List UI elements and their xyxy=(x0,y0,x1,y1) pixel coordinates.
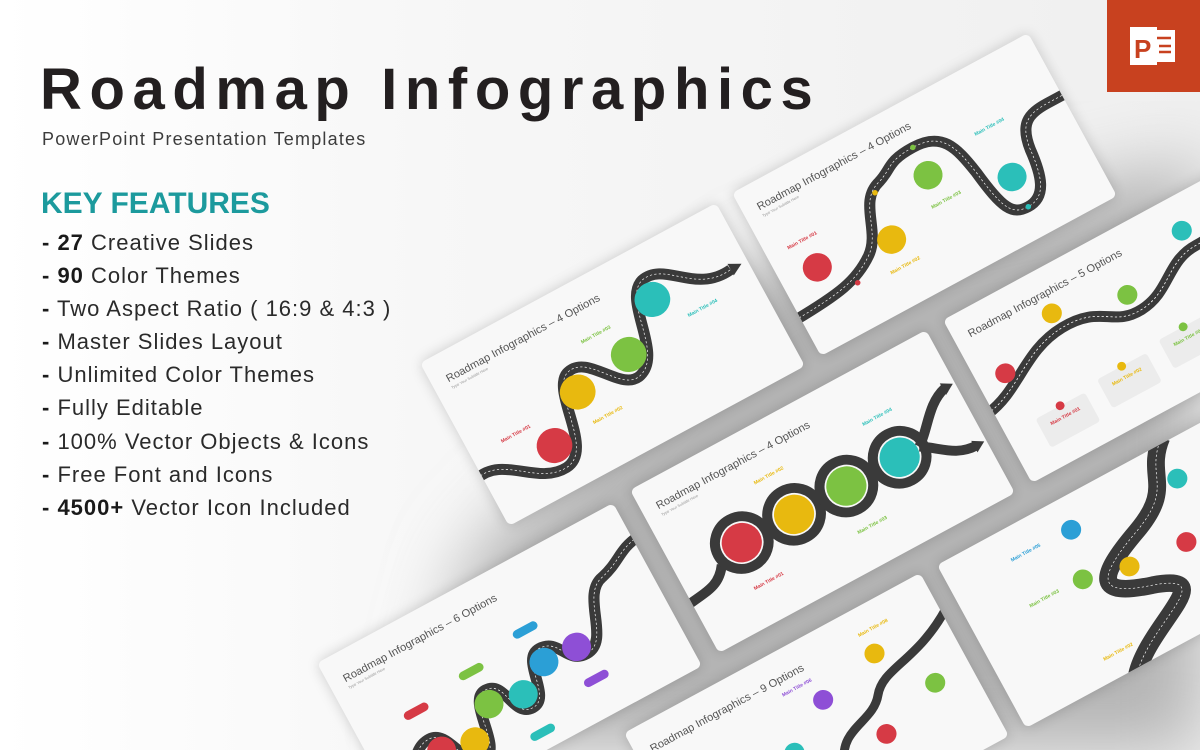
slide: S-road pins: Main Title #02 xyxy=(1102,642,1134,663)
feature list: - 100% Vector Objects & Icons xyxy=(42,429,369,454)
feature list: - Two Aspect Ratio ( 16:9 & 4:3 ) xyxy=(42,296,391,321)
slide: 4 options left: Main Title #02 xyxy=(592,405,624,426)
slide: S-road pins: Main Title #03 xyxy=(1029,588,1061,609)
slide: 4 options top xyxy=(732,33,1117,356)
slide: 4 options left: Main Title #04 xyxy=(687,298,719,319)
slide: 4 options left: Type Your Subtitle Here xyxy=(450,366,489,390)
slide: 9 options: Main Title #08 xyxy=(857,618,889,639)
subtitle: PowerPoint Presentation Templates xyxy=(42,129,366,149)
slide: 4 options left xyxy=(420,203,805,526)
feature list: - 4500+ Vector Icon Included xyxy=(42,495,351,520)
feature list xyxy=(42,230,391,520)
slide: 4 options top: Main Title #03 xyxy=(930,190,962,211)
slide: 4 options top: Main Title #04 xyxy=(974,117,1006,138)
slide: 4 options center: Main Title #04 xyxy=(861,407,893,428)
slide: 9 options: Main Title #06 xyxy=(781,677,813,698)
slide: 5 options: Roadmap Infographics – 5 Options xyxy=(966,247,1125,340)
slide: 5 options xyxy=(943,160,1200,483)
slide: 4 options center: Type Your Subtitle Here xyxy=(660,493,699,517)
icon: powerpoint xyxy=(1107,0,1200,92)
slide: 4 options center: Main Title #01 xyxy=(753,571,785,592)
slide: S-road pins: Main Title #05 xyxy=(1010,543,1042,563)
feature list: - Master Slides Layout xyxy=(42,329,283,354)
slide: 4 options top: Type Your Subtitle Here xyxy=(761,194,800,218)
slide: 4 options center xyxy=(630,330,1015,653)
slide: 4 options center: Main Title #02 xyxy=(753,465,785,486)
feature list: - Fully Editable xyxy=(42,395,204,420)
feature list: - Free Font and Icons xyxy=(42,462,273,487)
slide: 5 options: Main Title #02 xyxy=(1111,367,1143,388)
slide: 4 options left: Roadmap Infographics – 4 Options xyxy=(444,292,603,385)
feature list: - 27 Creative Slides xyxy=(42,230,254,255)
slide: 4 options left: Main Title #03 xyxy=(580,325,612,345)
slide: 9 options xyxy=(624,573,1009,750)
slide: 4 options top: Roadmap Infographics – 4 Options xyxy=(755,120,914,213)
icon: powerpoint: P xyxy=(1134,34,1151,64)
slide: 4 options center: Main Title #03 xyxy=(857,515,889,536)
heading: key features: KEY FEATURES xyxy=(41,187,270,220)
slide: 4 options center: Roadmap Infographics – 4 Options xyxy=(654,419,813,512)
slide: 6 options: Type Your Subtitle Here xyxy=(347,666,386,690)
title: Roadmap Infographics xyxy=(40,57,820,122)
slide: 4 options top: Main Title #01 xyxy=(786,230,818,251)
slide: 5 options: Main Title #01 xyxy=(1050,406,1082,427)
slide: 4 options left: Main Title #01 xyxy=(500,424,532,445)
slide: S-road pins xyxy=(937,405,1200,728)
slide: 4 options top: Main Title #02 xyxy=(890,255,922,276)
feature list: - Unlimited Color Themes xyxy=(42,362,315,387)
slide: 6 options xyxy=(317,503,702,750)
feature list: - 90 Color Themes xyxy=(42,263,241,288)
slide: 6 options: Roadmap Infographics – 6 Options xyxy=(341,592,500,685)
